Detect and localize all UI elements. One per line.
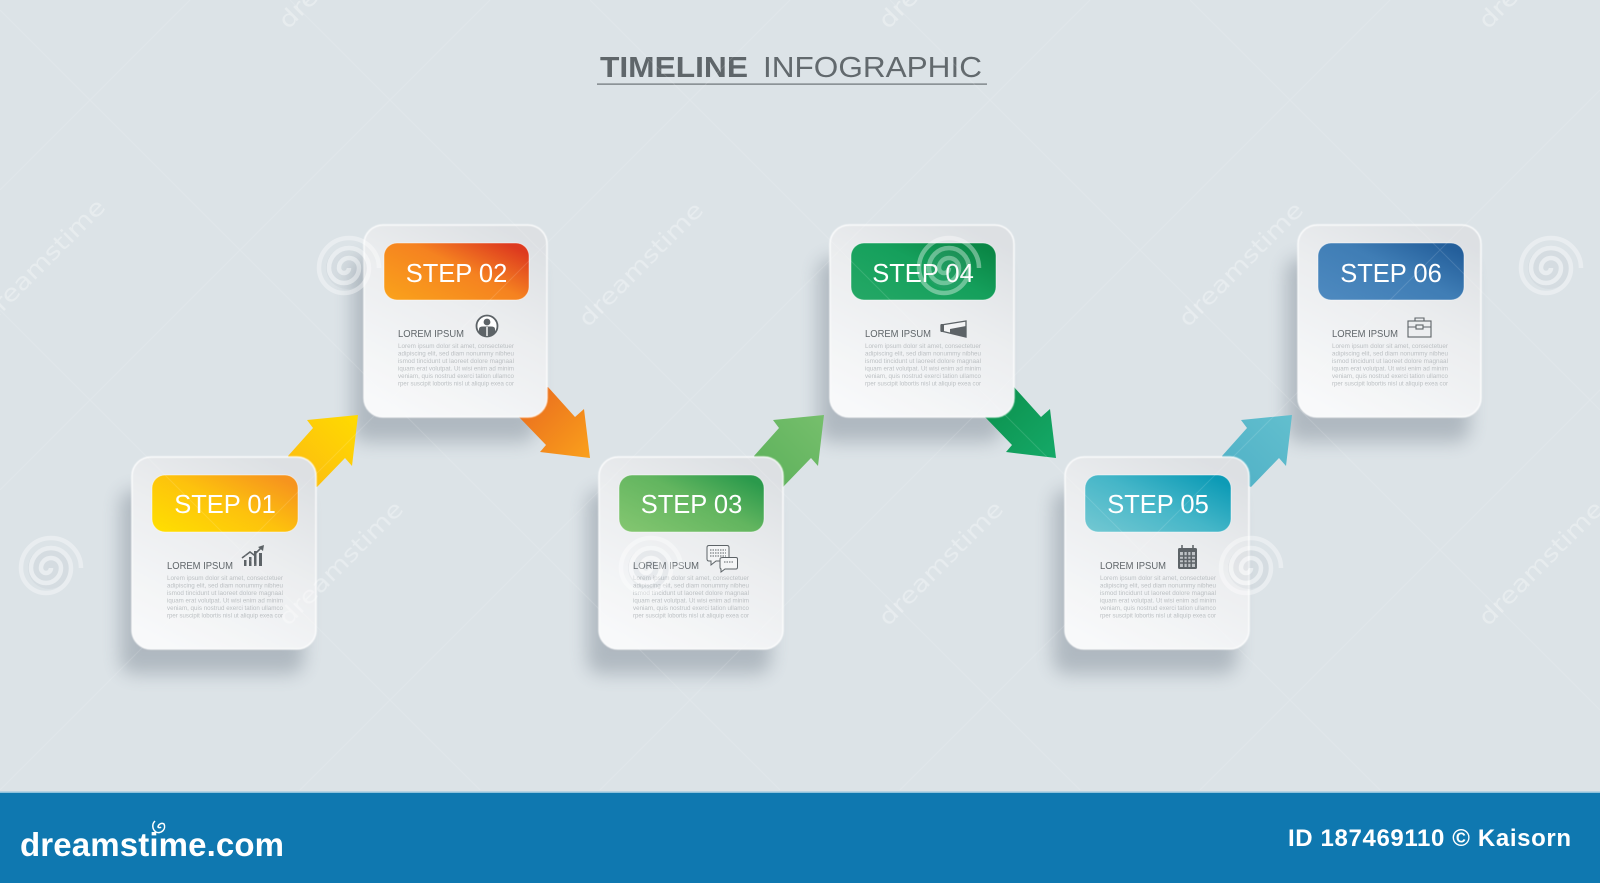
step 03 body text: ismod tincidunt ut laoreet dolore magnaal: [633, 590, 749, 597]
icon: person in circle: [476, 316, 498, 336]
step 06 body text: ismod tincidunt ut laoreet dolore magnaal: [1332, 358, 1448, 365]
step 04 subheading: LOREM IPSUM: [865, 329, 931, 340]
step 03 body text: iquam erat volutpat. Ut wisi enim ad minim: [633, 598, 749, 604]
step 01 body text: ismod tincidunt ut laoreet dolore magnaal: [167, 590, 283, 597]
step 04 body text: veniam, quis nostrud exerci tation ullamco: [865, 373, 982, 380]
step 03 body text: veniam, quis nostrud exerci tation ullamco: [633, 605, 750, 612]
step 03 header: [619, 475, 764, 532]
panel: step 06: [1298, 225, 1481, 417]
step 03 body text: [633, 575, 750, 620]
step 01 body text: Lorem ipsum dolor sit amet, consectetuer: [167, 575, 283, 582]
step 04 body text: [865, 343, 982, 388]
watermark text: dreamstime: [574, 197, 709, 332]
panel: step 01: [132, 457, 316, 649]
step 06 subheading: LOREM IPSUM: [1332, 329, 1398, 340]
panel: step 02: [364, 225, 547, 417]
step 03 body text: rper suscipit lobortis nisl ut aliquip exea cor: [633, 612, 749, 620]
step 01 subheading: LOREM IPSUM: [167, 561, 233, 572]
watermark text: dreamstime: [1474, 496, 1600, 631]
step 06 body text: veniam, quis nostrud exerci tation ullamco: [1332, 373, 1449, 380]
step 02 subheading: LOREM IPSUM: [398, 329, 464, 340]
step 01 header: STEP 01: [174, 491, 276, 519]
step 04 body text: iquam erat volutpat. Ut wisi enim ad minim: [865, 366, 981, 372]
step 02 body text: veniam, quis nostrud exerci tation ullamco: [398, 373, 515, 380]
step 05 subheading: LOREM IPSUM: [1100, 561, 1166, 572]
title: [597, 52, 987, 85]
step 01 header: [152, 475, 298, 532]
step 05 body text: veniam, quis nostrud exerci tation ullamco: [1100, 605, 1217, 612]
panel: step 04: [830, 225, 1014, 417]
step 05 header: STEP 05: [1107, 491, 1209, 519]
watermark spirals: [21, 238, 1581, 593]
watermark text: dreamstime: [874, 496, 1009, 631]
step 04 body text: ismod tincidunt ut laoreet dolore magnaal: [865, 358, 981, 365]
step 05 body text: rper suscipit lobortis nisl ut aliquip exea cor: [1100, 612, 1216, 620]
panel: step 05: [1065, 457, 1249, 649]
step 05 body text: iquam erat volutpat. Ut wisi enim ad minim: [1100, 598, 1216, 604]
title: TIMELINE: [600, 52, 748, 84]
step 05 body text: adipiscing elit, sed diam nonummy nibheu: [1100, 582, 1216, 590]
step 03 body text: adipiscing elit, sed diam nonummy nibheu: [633, 582, 749, 590]
arrow: step 4 to step 5: [985, 387, 1056, 458]
step 06 body text: rper suscipit lobortis nisl ut aliquip exea cor: [1332, 380, 1448, 388]
arrow: step 1 to step 2: [288, 415, 358, 487]
step 01 body text: adipiscing elit, sed diam nonummy nibheu: [167, 582, 283, 590]
step 04 body text: adipiscing elit, sed diam nonummy nibheu: [865, 350, 981, 358]
card shadows: [120, 258, 1470, 674]
step 05 body text: Lorem ipsum dolor sit amet, consectetuer: [1100, 575, 1216, 582]
brand logo: dreamstime.com: [20, 826, 284, 863]
step 01 body text: veniam, quis nostrud exerci tation ullamco: [167, 605, 284, 612]
step 02 body text: rper suscipit lobortis nisl ut aliquip exea cor: [398, 380, 514, 388]
step 03 body text: Lorem ipsum dolor sit amet, consectetuer: [633, 575, 749, 582]
step 03 header: STEP 03: [641, 491, 742, 519]
step 01 body text: [167, 575, 284, 620]
panel: step 03: [599, 457, 783, 649]
footer banner: [0, 792, 1600, 883]
step 02 body text: [398, 343, 515, 388]
step 02 body text: ismod tincidunt ut laoreet dolore magnaal: [398, 358, 514, 365]
icon: briefcase: [1408, 318, 1431, 337]
step 04 header: [851, 243, 996, 300]
watermark text: dreamstime: [1174, 197, 1309, 332]
step 05 body text: [1100, 575, 1217, 620]
step 02 body text: Lorem ipsum dolor sit amet, consectetuer: [398, 343, 514, 350]
icon: calendar: [1178, 545, 1197, 569]
arrow: step 3 to step 4: [754, 415, 824, 487]
icon: speech bubbles: [707, 546, 738, 572]
watermark text: [0, 0, 1600, 631]
step 04 body text: Lorem ipsum dolor sit amet, consectetuer: [865, 343, 981, 350]
icon: megaphone: [941, 321, 966, 337]
step 04 header: STEP 04: [872, 260, 974, 288]
step 06 body text: adipiscing elit, sed diam nonummy nibheu: [1332, 350, 1448, 358]
step 04 body text: rper suscipit lobortis nisl ut aliquip exea cor: [865, 380, 981, 388]
step 02 header: STEP 02: [406, 260, 507, 288]
step 02 body text: adipiscing elit, sed diam nonummy nibheu: [398, 350, 514, 358]
step 06 header: STEP 06: [1340, 260, 1442, 288]
step 01 body text: iquam erat volutpat. Ut wisi enim ad minim: [167, 598, 283, 604]
step 01 body text: rper suscipit lobortis nisl ut aliquip exea cor: [167, 612, 283, 620]
arrow: step 2 to step 3: [519, 387, 590, 458]
arrow: step 5 to step 6: [1222, 415, 1292, 487]
image id and credit: ID 187469110 © Kaisorn: [1288, 825, 1571, 852]
step 02 header: [384, 243, 529, 300]
watermark text: dreamstime: [274, 496, 409, 631]
title: INFOGRAPHIC: [763, 52, 982, 84]
step 06 header: [1318, 243, 1464, 300]
step 03 subheading: LOREM IPSUM: [633, 561, 699, 572]
step 06 body text: Lorem ipsum dolor sit amet, consectetuer: [1332, 343, 1448, 350]
step 05 body text: ismod tincidunt ut laoreet dolore magnaal: [1100, 590, 1216, 597]
icon: rising bar chart: [242, 545, 264, 566]
step 06 body text: [1332, 343, 1449, 388]
step 06 body text: iquam erat volutpat. Ut wisi enim ad minim: [1332, 366, 1448, 372]
step 05 header: [1085, 475, 1231, 532]
step 02 body text: iquam erat volutpat. Ut wisi enim ad minim: [398, 366, 514, 372]
